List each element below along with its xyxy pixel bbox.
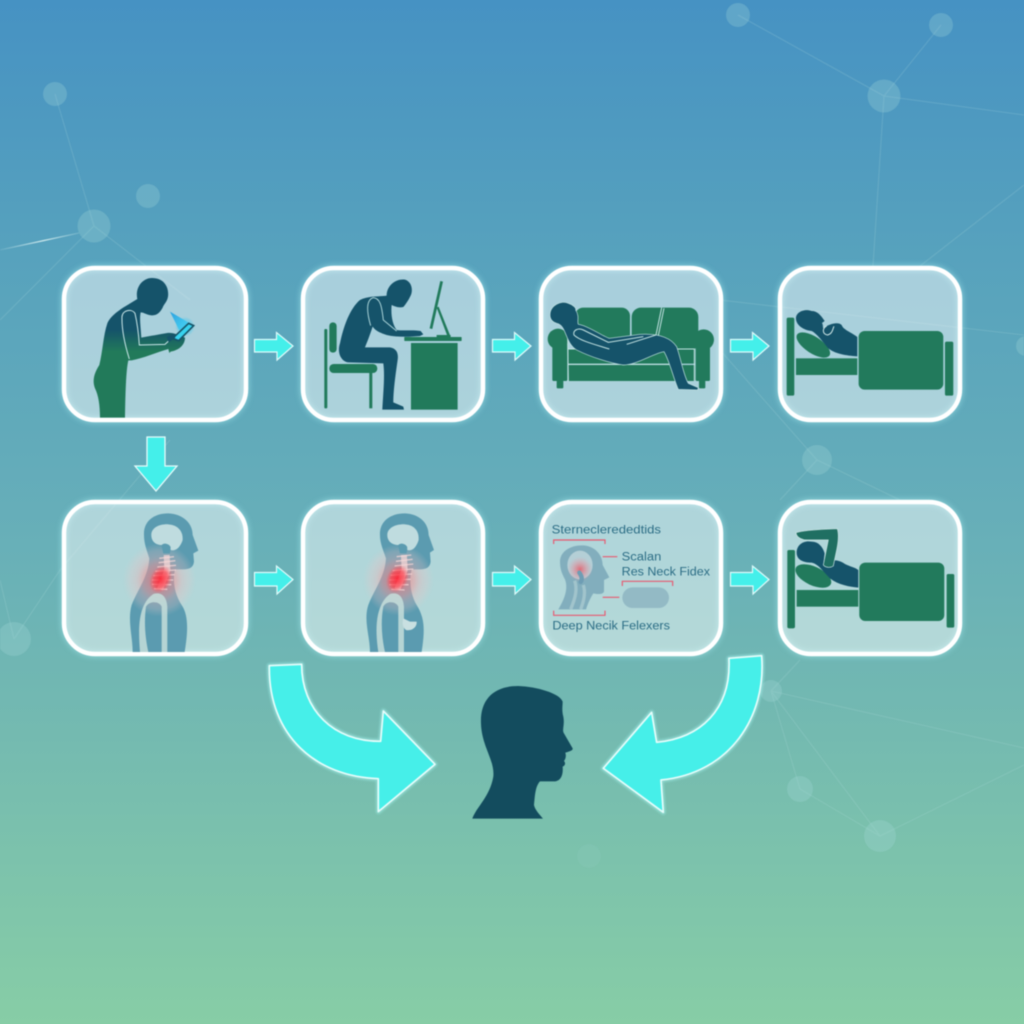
- arrow: bottom row 1 to 2: [254, 566, 293, 594]
- arrow: top row 2 to 3: [492, 332, 531, 360]
- diagram: head anatomy with labels: Scalan: [622, 549, 661, 563]
- diagram: head anatomy with labels: [552, 523, 710, 633]
- arrow: bottom row 2 to 3: [492, 566, 531, 594]
- panel: neck pain upright: [64, 502, 246, 654]
- panel: neck muscle labels: [541, 502, 721, 654]
- panel: sleeping with raised arm: [780, 502, 960, 654]
- diagram: head anatomy with labels: Sterneclerededtids: [552, 523, 661, 536]
- panel: couch slouching: [541, 268, 721, 420]
- arrow: top row 1 to 2: [254, 332, 293, 360]
- icon: person reclining on sofa with laptop: [548, 302, 714, 390]
- panel: side sleeping in bed: [780, 268, 960, 420]
- diagram: head anatomy with labels: Res Neck Fidex: [622, 565, 710, 579]
- diagram: head anatomy with labels: Deep Necik Felexers: [552, 619, 670, 633]
- icon: spine figure with red pain glow: [123, 513, 198, 652]
- panel: desk work: [303, 268, 483, 420]
- icon: head silhouette: [472, 686, 573, 819]
- icon: person in bed with arm over head: [787, 529, 954, 628]
- arrow: bottom row 3 to 4: [730, 566, 769, 594]
- icon: person lying on pillow in bed: [787, 310, 953, 396]
- arrow: top row 3 to 4: [730, 332, 769, 360]
- arrow: down from phone panel: [135, 437, 177, 491]
- panel: phone use: [64, 268, 246, 420]
- arrow: large curved left: [269, 664, 435, 812]
- panel: neck pain forward: [303, 502, 483, 654]
- icon: person looking down at phone: [94, 278, 194, 418]
- icon: person seated at desk: [324, 279, 462, 410]
- arrow: large curved right: [603, 656, 762, 812]
- icon: spine figure with bent arm: [363, 513, 434, 652]
